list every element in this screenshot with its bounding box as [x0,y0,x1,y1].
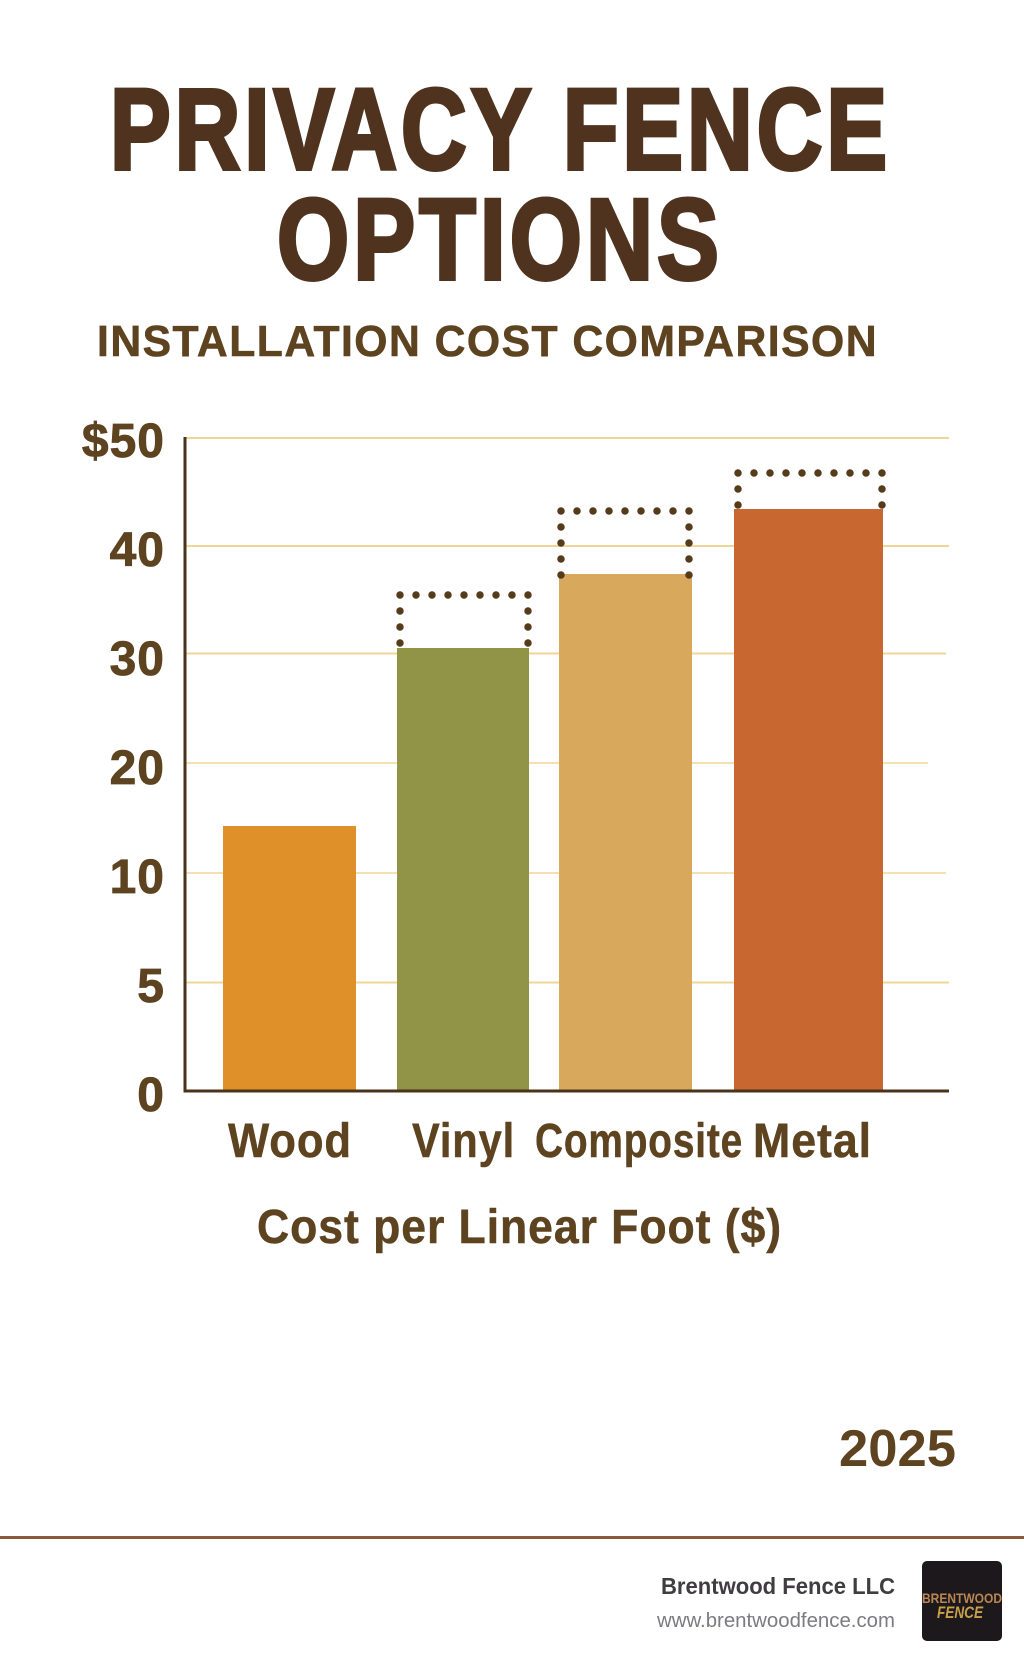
icon: logo: FENCE [937,1603,984,1622]
y axis labels: 20 [110,742,165,795]
y axis labels: 30 [110,633,165,686]
dotted range: composite [561,511,689,576]
year: 2025 [839,1420,956,1478]
category labels: Composite [535,1115,743,1168]
bar: vinyl [397,648,529,1091]
chart axes [185,437,949,1091]
title: OPTIONS [277,176,723,304]
bar: composite [559,574,692,1091]
category labels: Wood [228,1115,352,1168]
category labels: Metal [753,1115,872,1168]
website: www.brentwoodfence.com [656,1609,895,1632]
dotted range: vinyl [400,595,528,644]
y axis labels [82,415,165,1122]
bar chart [82,415,949,1254]
category labels [228,1115,872,1168]
y axis labels: 10 [110,851,165,904]
title [110,66,891,304]
y axis labels: 0 [137,1069,165,1122]
footer divider [0,1536,1024,1539]
x axis title: Cost per Linear Foot ($) [257,1201,782,1254]
y axis labels: $50 [82,415,165,468]
footer brand [656,1561,1002,1641]
y axis labels: 40 [110,524,165,577]
bar: wood [223,826,356,1091]
category labels: Vinyl [412,1115,515,1168]
icon: logo: BRENTWOOD [922,1590,1002,1606]
bar: metal [734,509,883,1091]
subtitle: INSTALLATION COST COMPARISON [97,317,878,366]
company name: Brentwood Fence LLC [661,1573,895,1599]
icon: logo [922,1561,1002,1641]
y axis labels: 5 [137,960,165,1013]
dotted range: metal [738,473,882,506]
